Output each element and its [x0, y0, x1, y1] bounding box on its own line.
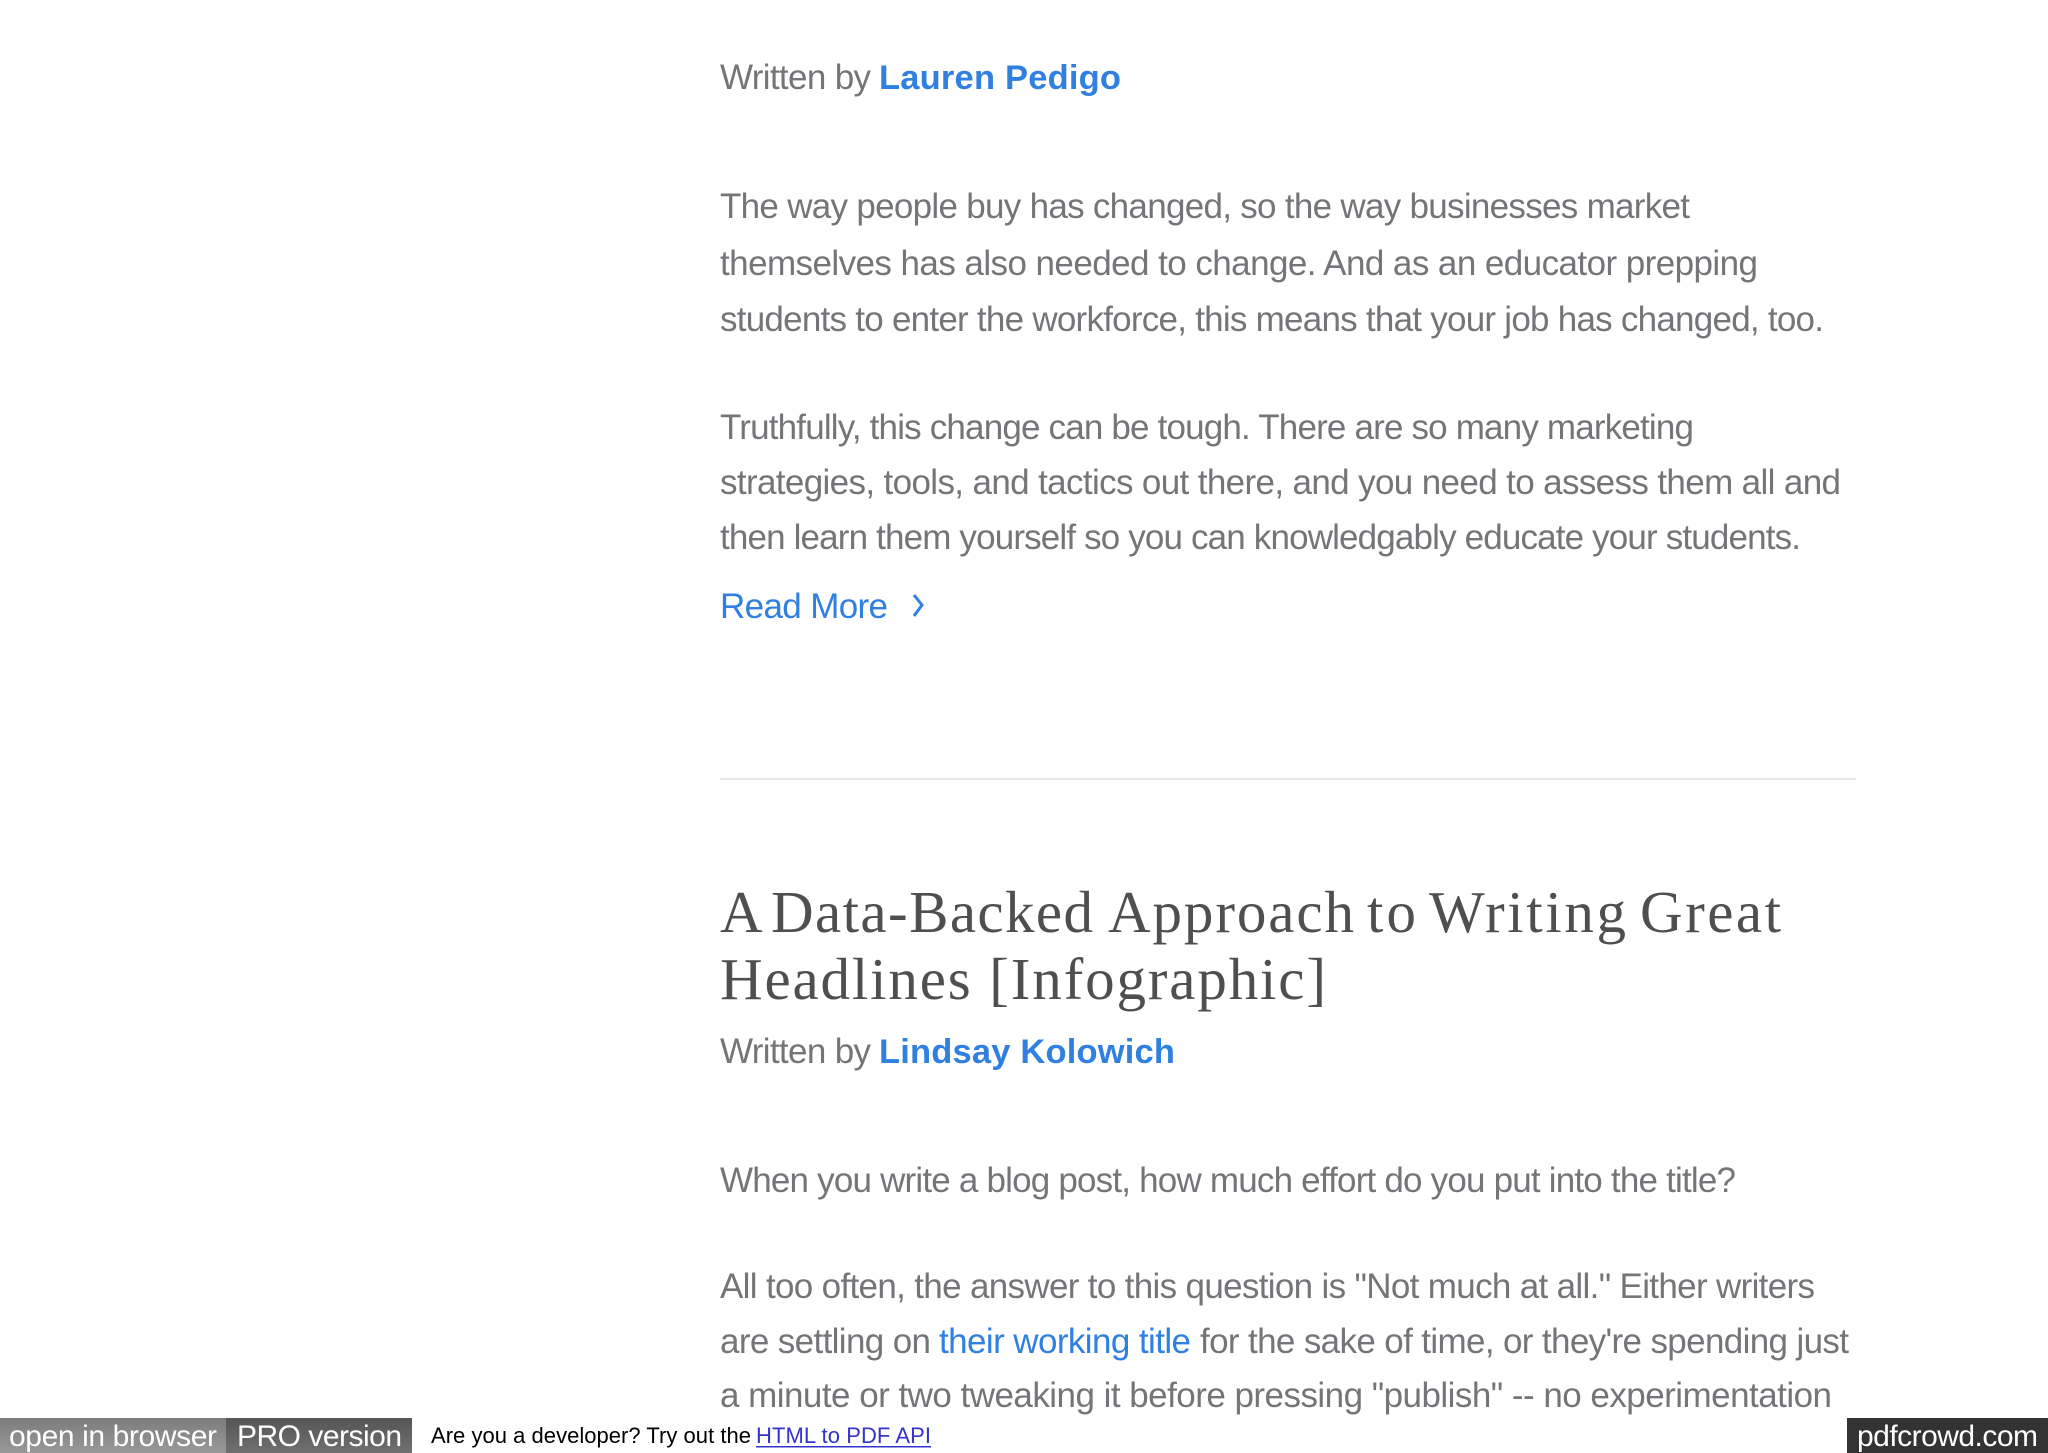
- byline: Lauren Pedigo: [720, 58, 1121, 97]
- text: developer prompt: HTML to PDF API: [756, 1423, 931, 1448]
- text block: third paragraph: [720, 1267, 1849, 1415]
- byline: Lindsay Kolowich: Written by: [720, 1032, 872, 1071]
- text block: third paragraph: a minute or two tweaking it before pressing "publish" -- no experimentation: [720, 1376, 1832, 1415]
- heading: article title: A: [720, 879, 763, 945]
- button: open in browser: open in browser: [9, 1420, 217, 1453]
- button: PRO version: PRO version: [237, 1420, 402, 1453]
- byline: Lindsay Kolowich: [720, 1032, 1175, 1071]
- text block: third paragraph: are settling on: [720, 1322, 931, 1361]
- text block: first paragraph: [720, 187, 1824, 339]
- text block: first paragraph: students to enter the workforce, this means that your job has changed, too.: [720, 300, 1824, 339]
- text block: second paragraph: then learn them yourself so you can knowledgably educate your students.: [720, 518, 1801, 557]
- byline: Lauren Pedigo: Lauren Pedigo: [879, 59, 1121, 97]
- text block: first paragraph: The way people buy has changed, so the way businesses market: [720, 187, 1690, 226]
- text block: first paragraph: themselves has also needed to change. And as an educator prepping: [720, 244, 1758, 283]
- heading: article title: Writing: [1429, 879, 1626, 945]
- text block: second paragraph: [720, 408, 1841, 557]
- text block: second paragraph: strategies, tools, and tactics out there, and you need to assess them all and: [720, 463, 1841, 502]
- badge: pdfcrowd.com: pdfcrowd.com: [1857, 1420, 2038, 1453]
- heading: article title: to: [1367, 879, 1416, 945]
- text: developer prompt: Are you a developer? Try out the: [431, 1423, 751, 1448]
- icon: chevron: [914, 595, 922, 616]
- heading: article title: Data-Backed: [771, 879, 1093, 945]
- heading: article title: Headlines [Infographic]: [720, 946, 1326, 1012]
- text block: second paragraph: Truthfully, this change can be tough. There are so many marketing: [720, 408, 1694, 447]
- heading: article title: [720, 879, 1782, 1012]
- text: developer prompt: [431, 1423, 931, 1448]
- text block: third paragraph: for the sake of time, or they're spending just: [1200, 1322, 1849, 1361]
- byline: Lindsay Kolowich: Lindsay Kolowich: [879, 1033, 1175, 1071]
- heading: article title: Great: [1640, 879, 1782, 945]
- footer: pdfcrowd bar: [0, 1418, 2048, 1453]
- heading: article title: Approach: [1108, 879, 1354, 945]
- byline: Lauren Pedigo: Written by: [720, 58, 872, 97]
- text block: question: When you write a blog post, how much effort do you put into the title?: [720, 1161, 1736, 1200]
- text block: third paragraph: All too often, the answer to this question is "Not much at all." Either writers: [720, 1267, 1815, 1306]
- text block: third paragraph: their working title: [939, 1322, 1191, 1361]
- link: read more: Read More: [720, 587, 888, 626]
